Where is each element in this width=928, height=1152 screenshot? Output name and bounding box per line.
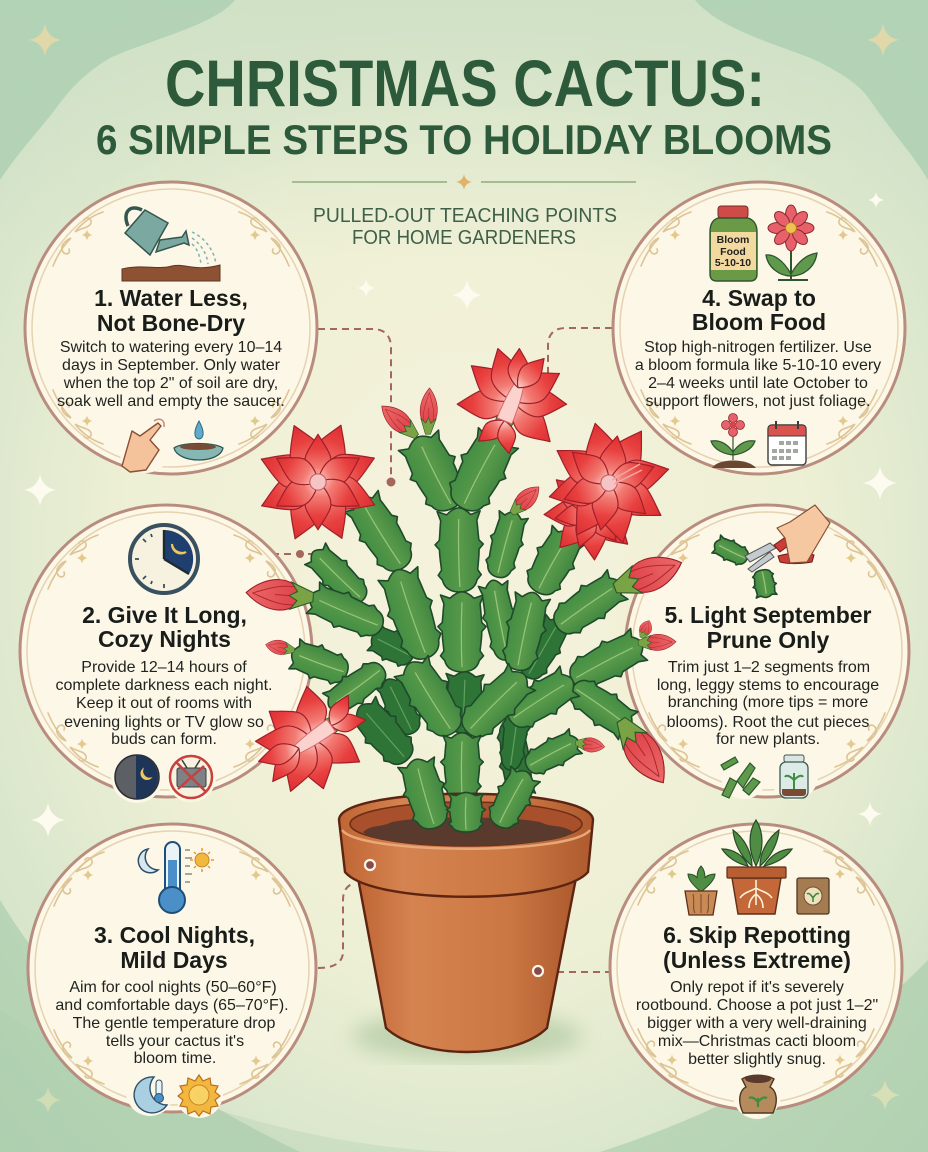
heading: Bloom Food — [692, 309, 826, 335]
icon: bloom food jar: Bloom — [717, 234, 749, 246]
heading: 4. Swap to — [702, 285, 816, 311]
flowers — [233, 329, 682, 816]
heading — [663, 922, 851, 973]
panel: step 1 — [25, 182, 317, 474]
icon: root-bound pot — [722, 820, 792, 914]
body text: bloom time. — [134, 1050, 216, 1067]
body text: Keep it out of rooms with — [76, 695, 252, 712]
subtitle: PULLED-OUT TEACHING POINTS — [313, 204, 617, 227]
icon: watering can and soil — [122, 208, 220, 281]
terracotta pot — [339, 794, 593, 1052]
body text: bigger with a very well-draining — [647, 1015, 867, 1032]
icon: soil bag — [797, 878, 829, 914]
heading: Prune Only — [707, 627, 830, 653]
body text: tells your cactus it's — [106, 1033, 244, 1050]
body text: buds can form. — [111, 731, 217, 748]
subtitle — [313, 204, 617, 249]
subtitle: FOR HOME GARDENERS — [352, 226, 576, 249]
body text: complete darkness each night. — [55, 677, 273, 694]
panel: step 4 — [613, 182, 905, 474]
heading — [692, 285, 826, 335]
panel: step 2 — [20, 505, 312, 803]
heading: Not Bone-Dry — [97, 310, 245, 336]
heading: 3. Cool Nights, — [94, 922, 255, 948]
heading — [664, 602, 872, 653]
icon: bloom food jar — [710, 206, 757, 281]
body text: Provide 12–14 hours of — [81, 659, 247, 676]
icon: calendar — [768, 421, 806, 465]
body text — [55, 659, 273, 748]
icon: moon thermometer — [126, 1068, 174, 1116]
icon: finger test — [118, 419, 172, 473]
panel: step 6 — [610, 820, 902, 1119]
body text: The gentle temperature drop — [73, 1015, 275, 1032]
heading: 1. Water Less, — [94, 285, 248, 311]
body text: blooms). Root the cut pieces — [667, 714, 869, 731]
icon: red flower — [766, 205, 817, 280]
body text: soak well and empty the saucer. — [57, 393, 285, 410]
icon: dark room — [111, 751, 163, 803]
pot shadow — [352, 1012, 582, 1060]
icon: no TV — [166, 752, 216, 802]
pot callout dot — [533, 966, 543, 976]
icon: potted flower — [711, 414, 756, 468]
icon: hand with pruners — [710, 505, 830, 599]
icon: rooting jar — [770, 752, 818, 800]
cactus plant — [286, 423, 651, 801]
body text: support flowers, not just foliage. — [645, 393, 871, 410]
heading — [82, 602, 247, 652]
title: CHRISTMAS CACTUS: — [165, 46, 765, 120]
body text: Switch to watering every 10–14 — [60, 339, 282, 356]
icon: bloom food jar: 5-10-10 — [715, 257, 751, 269]
body text: Stop high-nitrogen fertilizer. Use — [644, 339, 872, 356]
icon: thermometer with moon and sun — [138, 842, 214, 913]
heading: Cozy Nights — [98, 626, 231, 652]
body text: rootbound. Choose a pot just 1–2" — [636, 997, 878, 1014]
heading: (Unless Extreme) — [663, 947, 851, 973]
body text — [635, 339, 881, 410]
body text: better slightly snug. — [688, 1051, 826, 1068]
heading: 6. Skip Repotting — [663, 922, 851, 948]
body text: 2–4 weeks until late October to — [648, 375, 868, 392]
title: 6 SIMPLE STEPS TO HOLIDAY BLOOMS — [96, 116, 832, 163]
divider — [292, 174, 636, 190]
icon: soil sack — [733, 1071, 781, 1119]
body text: Trim just 1–2 segments from — [668, 659, 870, 676]
body text — [636, 979, 878, 1068]
plant base in pot — [395, 754, 543, 835]
body text: Only repot if it's severely — [670, 979, 844, 996]
body text: days in September. Only water — [62, 357, 281, 374]
pot rim — [339, 794, 593, 897]
heading — [94, 922, 255, 973]
icon: cut segments — [721, 753, 767, 799]
body text: mix—Christmas cacti bloom — [658, 1033, 856, 1050]
body text: a bloom formula like 5-10-10 every — [635, 357, 881, 374]
body text: branching (more tips = more — [668, 694, 868, 711]
body text — [57, 339, 285, 410]
body text: Aim for cool nights (50–60°F) — [69, 979, 277, 996]
heading: Mild Days — [120, 947, 228, 973]
connector lines — [272, 328, 612, 972]
icon: sun — [175, 1070, 223, 1118]
heading — [94, 285, 248, 336]
body text — [55, 979, 289, 1067]
heading: 5. Light September — [664, 602, 872, 628]
pot body — [358, 878, 576, 1052]
title — [96, 46, 832, 163]
body text: and comfortable days (65–70°F). — [55, 997, 289, 1014]
panel: step 5 — [625, 505, 909, 800]
panel: step 3 — [28, 824, 316, 1118]
heading: 2. Give It Long, — [82, 602, 247, 628]
body text: evening lights or TV glow so — [64, 714, 264, 731]
icon: small pot — [685, 866, 717, 915]
body text: for new plants. — [716, 731, 820, 748]
icon: bloom food jar: Food — [720, 246, 746, 258]
buds — [245, 388, 687, 792]
icon: night clock — [130, 525, 198, 593]
icon: saucer and drop — [174, 421, 223, 460]
pot callout dot — [365, 860, 375, 870]
body text — [657, 659, 879, 748]
body text: long, leggy stems to encourage — [657, 677, 879, 694]
body text: when the top 2" of soil are dry, — [63, 375, 278, 392]
